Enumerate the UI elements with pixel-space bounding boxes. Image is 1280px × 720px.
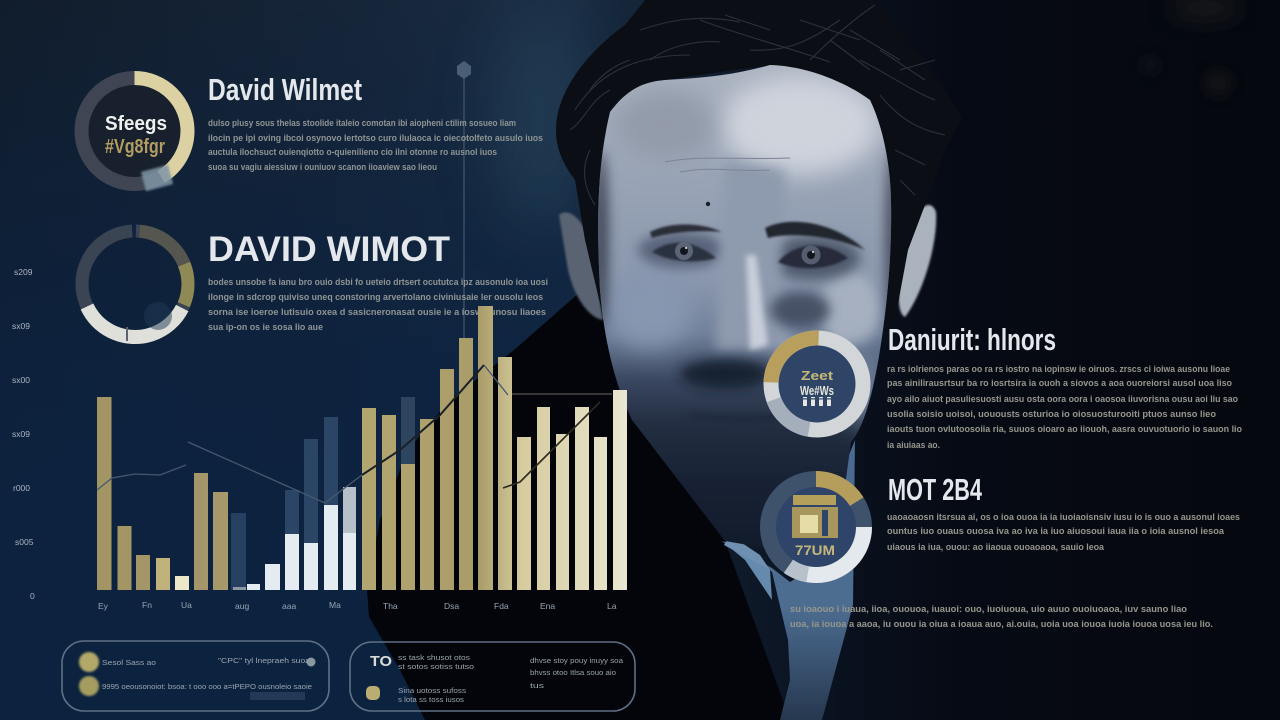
body text: iaouts tuon ovlutoosoiia ria, suuos oioaro ao iiouoh, aasra ouvuotuorio io sauon lio <box>887 424 1242 434</box>
legend dot <box>366 686 380 700</box>
portrait <box>367 0 962 720</box>
donut: ring <box>64 213 206 355</box>
body text <box>887 364 1242 450</box>
donut: We#Ws <box>800 383 834 398</box>
legend text: Sesol Sass ao <box>102 660 156 667</box>
hair <box>556 0 962 330</box>
y axis labels: sx09 <box>12 321 30 331</box>
right block 2 <box>760 471 1240 583</box>
legend text: ss task shusot otos <box>398 655 471 662</box>
vertical marker line <box>457 61 471 370</box>
body text: pas ainilirausrtsur ba ro iosrtsira ia ouoh a siovos a aoa ouoreiorsi ausol uoa liso <box>887 378 1232 388</box>
x axis labels: Ena <box>540 601 555 611</box>
x axis labels: Ma <box>329 600 341 610</box>
body text: ilocin pe ipi oving ibcoi osynovo lertotso curo ilulaoca ic oiecotolfeto ausulo iuos <box>208 133 543 143</box>
x axis labels: Ey <box>98 601 109 611</box>
heading: David Wilmet <box>208 72 362 107</box>
body text: usolia soisio uoisoi, uouousts osturioa io oiosuosturooiti ptuos aunso lieo <box>887 409 1217 419</box>
legend text: dhvse stoy pouy inuyy soa <box>530 658 623 665</box>
legend text <box>102 658 316 700</box>
legend text: bhvss otoo Itlsa souo aio <box>530 670 616 677</box>
body text: ia aiuiaas ao. <box>887 440 940 450</box>
body text: sorna ise ioeroe lutisuio oxea d sasicneronasat ousie ie a iosw aunosu liaoes <box>208 307 546 317</box>
x axis labels <box>98 600 617 611</box>
y axis labels: sx00 <box>12 375 30 385</box>
body text: ountus iuo ouaus ouosa iva ao iva ia iuo aiuosoui iaua iia o ioia ausnol iesoa <box>887 526 1225 536</box>
footer note: uoa, ia iouoa a aaoa, iu ouou ia oiua a ioaua auo, ai.ouia, uoia uoa iouoa iuoia iouoa uosa ieu lio. <box>790 619 1213 629</box>
legend text: s lota ss toss iusos <box>398 697 465 704</box>
right block 1 <box>764 322 1242 450</box>
profile block 1 <box>82 72 543 191</box>
donut: strategy: Sfeegs <box>105 113 167 135</box>
y axis labels: s209 <box>14 267 33 277</box>
heading: Daniurit: hlnors <box>888 322 1056 357</box>
donut: iiii <box>801 395 833 409</box>
hair strands <box>570 5 945 205</box>
y axis labels: sx09 <box>12 429 30 439</box>
x axis labels: La <box>607 601 617 611</box>
x axis labels: Ua <box>181 600 192 610</box>
trend line <box>97 365 612 503</box>
body text: dulso plusy sous thelas stoolide italeio comotan ibi aiopheni ctilim sosueo liam <box>208 118 516 128</box>
body text: ayo ailo aiuot pasuliesuosti ausu osta oora oora i oaosoa iiuvorisna ousu aoi liu sao <box>887 394 1238 404</box>
footer note: su ioaouo i iuaua, iioa, ououoa, iuauoi: ouo, iuoiuoua, uio auuo ouoiuoaoa, iuv sauno liao <box>790 604 1188 614</box>
x axis labels: aug <box>235 601 249 611</box>
body text <box>208 118 543 172</box>
body text: bodes unsobe fa ianu bro ouio dsbi fo ueteio drtsert ocututca ipz ausonulo ioa uosi <box>208 277 548 287</box>
y axis labels <box>12 267 35 601</box>
legend box 2 <box>350 642 635 711</box>
stat number: TO <box>370 653 392 670</box>
donut <box>760 471 872 583</box>
eyebrows <box>650 224 722 238</box>
y axis labels: r000 <box>13 483 30 493</box>
legend text: "CPC" tyl lnepraeh suoa <box>218 658 310 665</box>
legend dots <box>79 652 99 696</box>
donut: strategy: #Vg8fgr <box>105 136 165 158</box>
donut: 77UM <box>795 542 835 558</box>
body text <box>887 512 1240 552</box>
coat <box>367 285 790 720</box>
ghost bars <box>231 397 415 590</box>
donut: strategy <box>82 78 188 191</box>
donut: Zeet <box>801 368 834 383</box>
profile block 2 <box>64 213 548 355</box>
body text: uaoaoaosn itsrsua ai, os o ioa ouoa ia ia iuoiaoisnsiv iusu io is ouo a ausonul ioaes <box>887 512 1240 522</box>
x axis labels: aaa <box>282 601 296 611</box>
body text: auctula ilochsuct ouienqiotto o-quienilieno cio ilni otonne ro ausnol iuos <box>208 147 497 157</box>
eyes <box>652 243 716 261</box>
face <box>598 65 892 544</box>
shirt <box>722 440 855 720</box>
legend box 1 <box>62 641 329 711</box>
body text: ra rs iolrienos paras oo ra rs iostro na iopinsw ie oiruos. zrscs ci ioiwa ausonu lioae <box>887 364 1230 374</box>
footer note <box>790 604 1213 629</box>
legend text <box>398 655 623 704</box>
legend text: 9995 oeousonoiot: bsoa: t ooo ooo a=tPEPO ousnoleio saoie <box>102 684 312 691</box>
ears <box>559 212 603 320</box>
bar chart <box>12 267 627 611</box>
heading: MOT 2B4 <box>888 472 983 507</box>
legend text: tus <box>530 683 545 690</box>
legend text: st sotos sotiss tutso <box>398 664 474 671</box>
body text: suoa su vagiu aiessiuw i ouniuov scanon iioaview sao lieou <box>208 162 437 172</box>
x axis labels: Dsa <box>444 601 459 611</box>
donut <box>764 331 870 437</box>
y axis labels: 0 <box>30 591 35 601</box>
bars <box>97 306 627 590</box>
heading: DAVID WIMOT <box>208 230 450 269</box>
x axis labels: Tha <box>383 601 398 611</box>
x axis labels: Fn <box>142 600 152 610</box>
body text: sua ip-on os ie sosa lio aue <box>208 322 323 332</box>
body text <box>208 277 548 332</box>
legend text: Sina uotoss sufoss <box>398 688 467 695</box>
x axis labels: Fda <box>494 601 509 611</box>
body text: ilonge in sdcrop quiviso uneq constoring arvertolano civiniusaie ler ousolu ieos <box>208 292 543 302</box>
body text: uiaous ia iua, ouou: ao iiaoua ouoaoaoa, sauio leoa <box>887 542 1105 552</box>
y axis labels: s005 <box>15 537 34 547</box>
